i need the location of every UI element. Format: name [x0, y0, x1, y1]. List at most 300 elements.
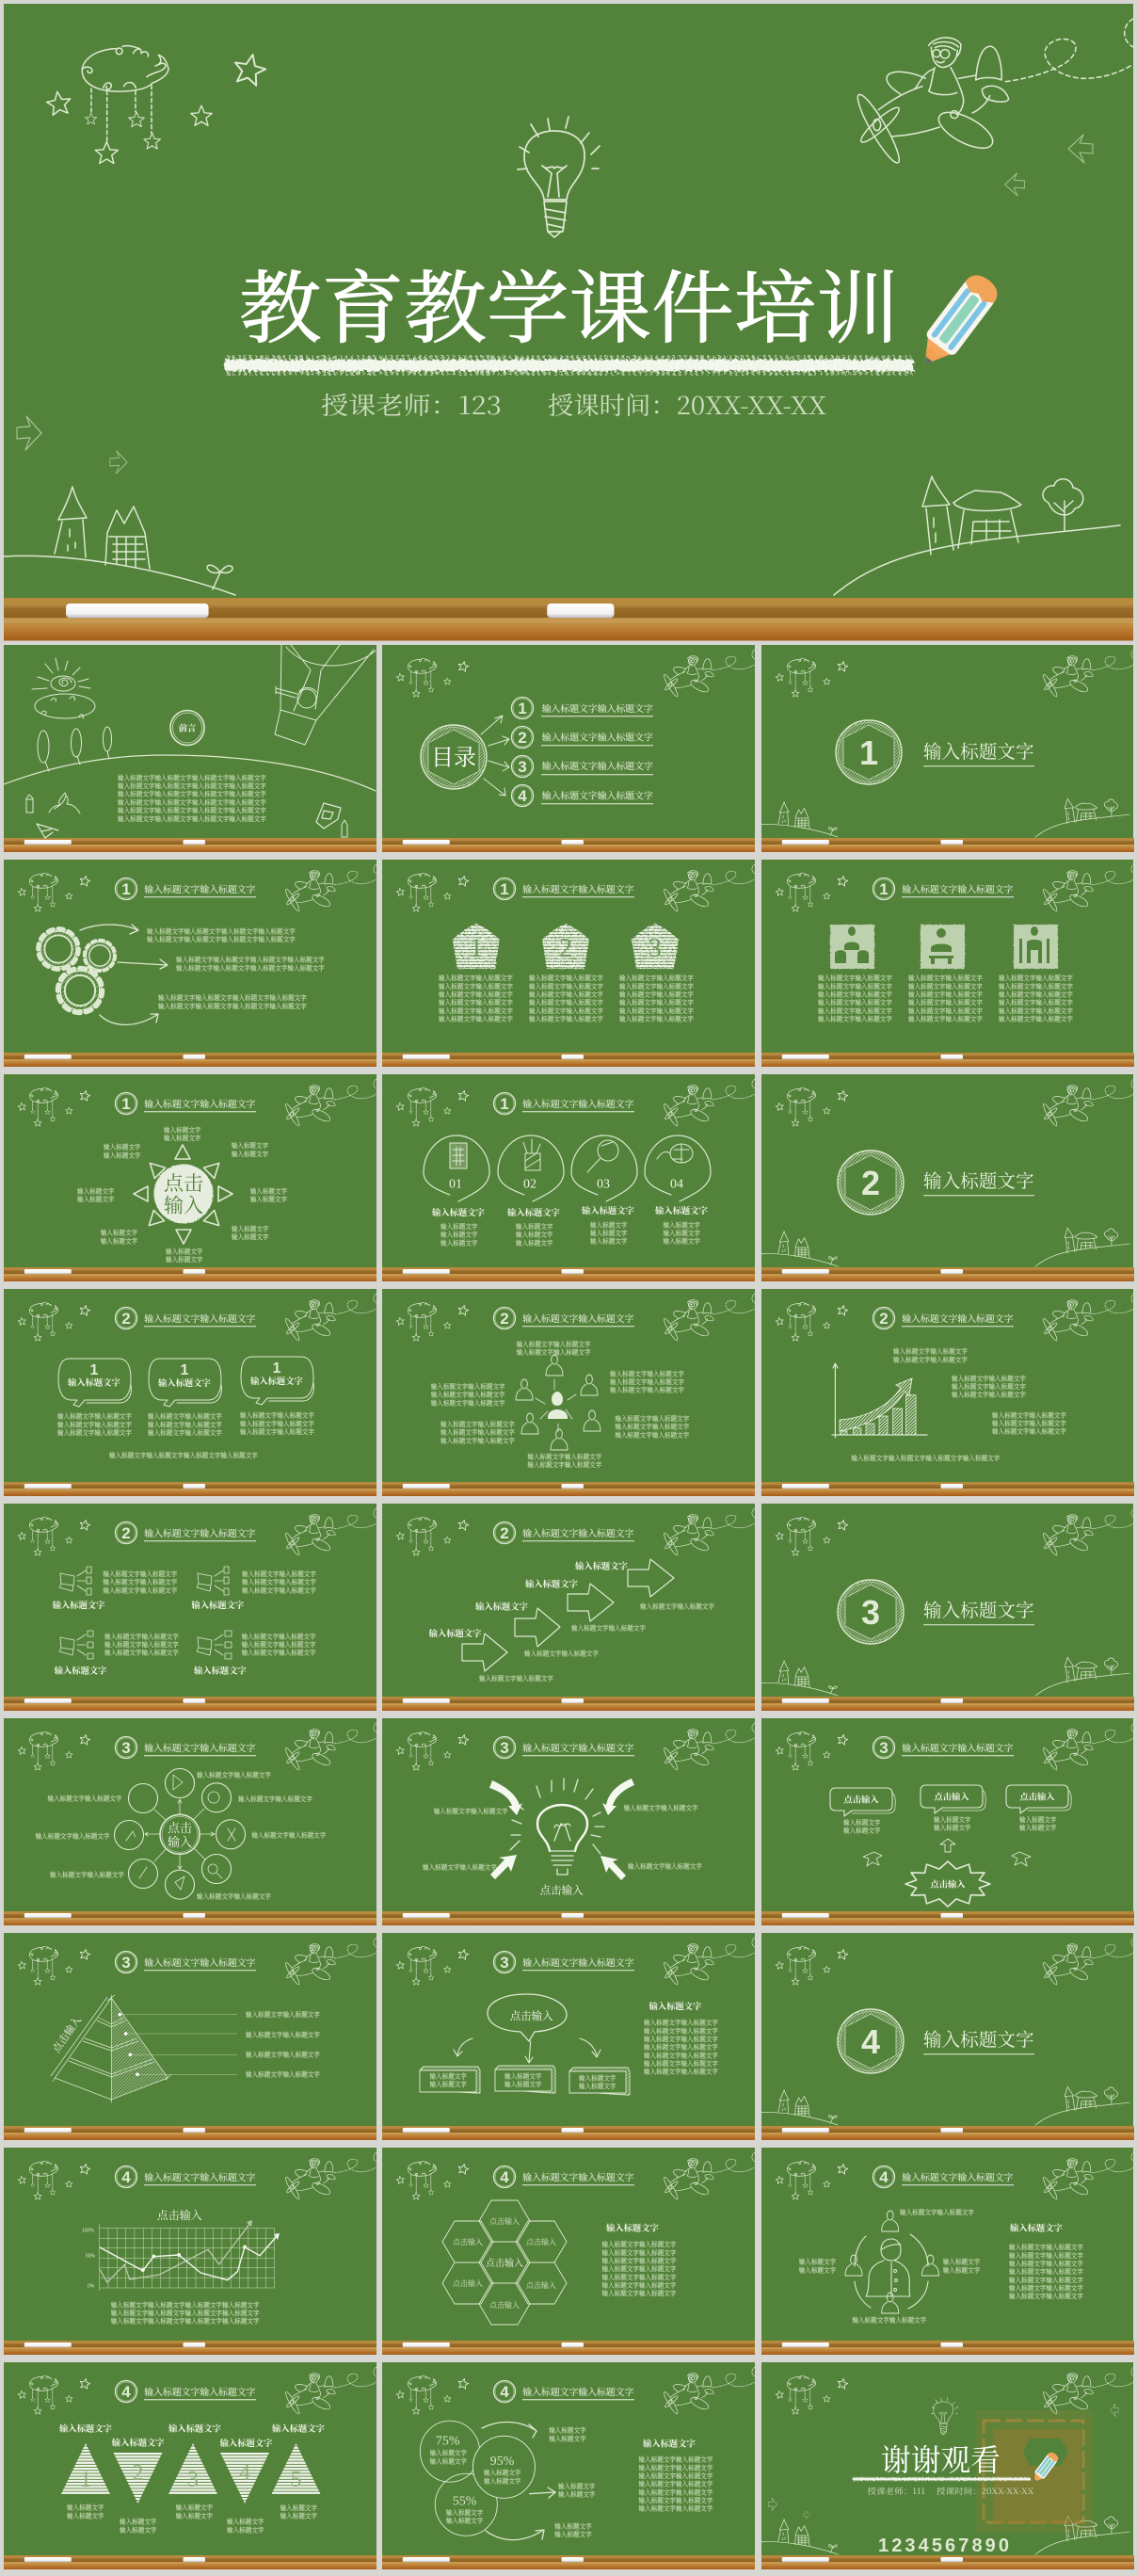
text columns: 输入标题文字输入标题文字 [818, 974, 892, 982]
labels: 输入标题文字 [166, 1255, 203, 1264]
side text: 输入标题文字输入标题文字 [602, 2248, 677, 2257]
titles: 输入标题文字 [475, 1601, 528, 1612]
hub label: 点击 [168, 1821, 192, 1835]
panel: slide chalk pentagons [382, 860, 755, 1067]
heading [873, 2165, 1014, 2188]
labels: 输入标题文字 [101, 1229, 138, 1237]
section badge: 2 [861, 1164, 880, 1202]
heading [115, 1307, 256, 1329]
labels: 输入标题文字 [232, 1150, 269, 1158]
doodles [18, 1508, 376, 1556]
labels: 输入标题文字 [549, 2434, 586, 2442]
heading: 输入标题文字输入标题文字 [522, 2171, 634, 2183]
panel: slide callouts and burst [761, 1718, 1134, 1925]
chalk tray [4, 1053, 376, 1067]
text columns: 输入标题文字输入标题文字 [619, 998, 694, 1006]
heading: 1 [500, 880, 509, 898]
chart title: 点击输入 [157, 2208, 202, 2222]
heading: 1 [121, 1095, 131, 1113]
titles: 输入标题文字 [53, 1600, 104, 1611]
text columns: 输入标题文字输入标题文字 [908, 1006, 983, 1015]
heading [873, 1307, 1014, 1329]
text columns: 输入标题文字输入标题文字 [999, 998, 1073, 1006]
sun centre [154, 1164, 213, 1224]
panel: slide line chart [4, 2148, 376, 2355]
labels: 输入标题文字输入标题文字 [893, 1347, 968, 1356]
titles: 输入标题文字 [582, 1205, 634, 1216]
underline [923, 1195, 1034, 1197]
captions: 输入标题文字 [67, 2511, 104, 2520]
heading [115, 877, 256, 900]
text columns: 输入标题文字输入标题文字 [818, 1006, 892, 1015]
text columns: 输入标题文字输入标题文字 [529, 1006, 603, 1015]
panel: slide flow boxes [382, 1933, 755, 2140]
side text: 输入标题文字输入标题文字 [644, 2051, 718, 2059]
text columns: 输入标题文字输入标题文字 [999, 982, 1073, 990]
side text: 输入标题文字输入标题文字 [644, 2043, 718, 2052]
side text: 输入标题文字输入标题文字 [638, 2463, 713, 2471]
labels: 输入标题文字输入标题文字 [246, 2050, 320, 2058]
text columns: 输入标题文字输入标题文字 [908, 982, 983, 990]
panel: slide sun diagram [4, 1074, 376, 1281]
numbers: 03 [597, 1177, 610, 1192]
labels: 输入标题文字 [549, 2426, 586, 2435]
labels: 输入标题文字 [554, 2530, 592, 2538]
labels: 输入标题文字 [166, 1247, 203, 1255]
burst [905, 1861, 990, 1907]
arrows [80, 925, 168, 1024]
side text: 输入标题文字输入标题文字 [1009, 2243, 1083, 2251]
axis labels: 100% [82, 2228, 94, 2233]
heading: 1 [879, 880, 889, 898]
labels [103, 1570, 316, 1657]
titles [53, 1600, 247, 1676]
honeycomb [442, 2200, 567, 2325]
text columns: 输入标题文字输入标题文字 [619, 974, 694, 982]
section title: 输入标题文字 [923, 2030, 1034, 2051]
title: 谢谢观看 [881, 2444, 1001, 2477]
chalk tray [382, 1911, 755, 1925]
labels: 输入标题文字 [250, 1195, 288, 1203]
labels: 输入标题文字输入标题文字 [50, 1870, 124, 1878]
labels: 输入标题文字输入标题文字 [246, 2069, 320, 2078]
circle captions: 输入标题文字 [430, 2456, 467, 2465]
chalk tray [382, 838, 755, 852]
labels: 输入标题文字输入标题文字 [900, 2208, 974, 2216]
doodles [776, 1938, 1134, 1986]
captions: 输入标题文字 [176, 2511, 213, 2520]
text columns: 输入标题文字输入标题文字 [999, 1006, 1073, 1015]
heading: 输入标题文字输入标题文字 [902, 2171, 1014, 2183]
text columns: 输入标题文字输入标题文字 [908, 974, 983, 982]
text block: 输入标题文字输入标题文字输入标题文字输入标题文字 [111, 2317, 260, 2326]
seal: preface: 前言 [179, 723, 196, 734]
panel: slide honeycomb [382, 2148, 755, 2355]
rotated label: 点击输入 [49, 2014, 84, 2055]
heading: 2 [500, 1524, 509, 1542]
captions: 输入标题文字输入标题文字 [524, 1650, 599, 1658]
captions: 输入标题文字 [67, 2504, 104, 2512]
captions [67, 2504, 317, 2534]
labels: 输入标题文字输入标题文字 [992, 1419, 1066, 1427]
callouts [830, 1785, 1071, 1816]
underline [923, 1624, 1034, 1626]
labels: 输入标题文字输入标题文字 [992, 1427, 1066, 1436]
labels: 输入标题文字输入标题文字 [615, 1423, 690, 1431]
text block: 输入标题文字输入标题文字输入标题文字输入标题文字 [118, 790, 266, 798]
doodles [396, 1079, 755, 1127]
labels: 输入标题文字 [232, 1232, 269, 1241]
icon: paper birds [17, 135, 1093, 474]
labels [549, 2426, 596, 2538]
captions [479, 1602, 714, 1682]
icon: light bulb [931, 2397, 958, 2435]
chalk pentagons: 3 [649, 934, 662, 963]
bar chart [832, 1363, 927, 1438]
text columns: 输入标题文字输入标题文字 [529, 1014, 603, 1022]
captions: 输入标题文字 [516, 1238, 553, 1247]
text columns: 输入标题文字输入标题文字 [529, 982, 603, 990]
labels: 输入标题文字输入标题文字 [246, 2030, 320, 2038]
box text: 输入标题文字 [579, 2073, 617, 2082]
heading: 输入标题文字输入标题文字 [144, 883, 256, 895]
percent values: 55% [453, 2495, 477, 2508]
percent values: 75% [436, 2435, 460, 2448]
side text: 输入标题文字输入标题文字 [644, 2035, 718, 2043]
numbered list: 输入标题文字输入标题文字 [542, 760, 653, 772]
subtitle: 授课老师：123 [321, 387, 502, 422]
labels: 输入标题文字输入标题文字 [246, 2010, 320, 2019]
text columns: 输入标题文字输入标题文字 [818, 998, 892, 1006]
text block: 输入标题文字输入标题文字输入标题文字输入标题文字 [118, 814, 266, 823]
heading [115, 1736, 256, 1759]
section badge: 3 [861, 1593, 880, 1632]
labels [423, 1804, 702, 1872]
text columns: 输入标题文字输入标题文字 [439, 998, 513, 1006]
labels: 输入标题文字输入标题文字 [431, 1382, 505, 1391]
doodles [776, 1723, 1134, 1771]
side text: 输入标题文字输入标题文字 [1009, 2292, 1083, 2300]
labels [36, 1771, 327, 1900]
labels: 输入标题文字 [164, 1134, 201, 1142]
labels: 输入标题文字 [799, 2265, 837, 2274]
labels: 输入标题文字输入标题文字 [517, 1340, 591, 1348]
axis labels [82, 2228, 96, 2290]
labels: 输入标题文字输入标题文字 [103, 1586, 178, 1594]
doodles [18, 2367, 376, 2415]
titles [429, 1560, 628, 1639]
labels: 输入标题文字输入标题文字 [952, 1382, 1026, 1391]
heading [115, 1951, 256, 1973]
doodles [18, 1723, 376, 1771]
labels: 输入标题文字输入标题文字 [434, 1807, 508, 1815]
heading: 4 [121, 2383, 131, 2401]
text block: 输入标题文字输入标题文字输入标题文字输入标题文字 [118, 773, 266, 781]
doodles [18, 1079, 376, 1127]
panel: closing slide [761, 2362, 1134, 2569]
captions: 输入标题文字 [934, 1815, 971, 1824]
titles: 输入标题文字 [429, 1628, 481, 1639]
side text: 输入标题文字输入标题文字 [1009, 2276, 1083, 2284]
labels: 输入标题文字输入标题文字 [103, 1578, 178, 1586]
heading: 3 [500, 1739, 509, 1757]
section title: 输入标题文字 [923, 1601, 1034, 1621]
chalk tray [761, 2341, 1134, 2355]
bubble labels: 输入标题文字 [250, 1376, 303, 1387]
heading: 输入标题文字输入标题文字 [902, 1312, 1014, 1325]
panel: slide people network [382, 1289, 755, 1496]
labels: 输入标题文字输入标题文字 [104, 1649, 179, 1657]
thick arrows [489, 1779, 634, 1880]
captions: 输入标题文字 [934, 1824, 971, 1832]
side text: 输入标题文字输入标题文字 [638, 2480, 713, 2488]
bubble labels: 1 [90, 1362, 99, 1378]
text blocks: 输入标题文字输入标题文字输入标题文字输入标题文字 [176, 956, 325, 964]
hub label: 输入 [168, 1835, 192, 1849]
numbered list: 4 [518, 787, 527, 805]
honeycomb: 点击输入 [526, 2237, 556, 2246]
bubble labels: 1 [273, 1360, 281, 1377]
labels: 输入标题文字输入标题文字 [610, 1386, 684, 1394]
chalk tray [4, 2555, 376, 2569]
captions: 输入标题文字 [227, 2518, 264, 2526]
labels: 输入标题文字 [104, 1151, 141, 1159]
labels: 输入标题文字 [558, 2490, 596, 2499]
side text: 输入标题文字输入标题文字 [638, 2504, 713, 2513]
heading [115, 2380, 256, 2403]
side text: 输入标题文字输入标题文字 [1009, 2267, 1083, 2276]
side text: 输入标题文字输入标题文字 [638, 2496, 713, 2504]
labels: 输入标题文字 [799, 2258, 837, 2266]
numbers: 04 [670, 1177, 683, 1192]
bubble labels [68, 1360, 303, 1389]
chalk tray [382, 1053, 755, 1067]
text columns: 输入标题文字输入标题文字 [529, 998, 603, 1006]
captions: 输入标题文字 [590, 1220, 628, 1229]
text columns: 输入标题文字输入标题文字 [999, 990, 1073, 998]
doodles: hills [761, 2516, 1129, 2554]
chalk tray [761, 1911, 1134, 1925]
doodles: hills and houses [4, 476, 1120, 595]
doodles [396, 1723, 755, 1771]
text columns [818, 974, 1073, 1022]
text columns: 输入标题文字输入标题文字 [439, 974, 513, 982]
titles: 输入标题文字 [507, 1207, 560, 1218]
heading: 输入标题文字输入标题文字 [144, 1527, 256, 1539]
underline [923, 2053, 1034, 2055]
heading: 输入标题文字输入标题文字 [144, 1312, 256, 1325]
heading [873, 1736, 1014, 1759]
side text: 输入标题文字输入标题文字 [602, 2256, 677, 2264]
side text: 输入标题文字输入标题文字 [1009, 2259, 1083, 2267]
side text: 输入标题文字输入标题文字 [644, 2059, 718, 2068]
triangle titles: 输入标题文字 [59, 2423, 112, 2435]
heading [493, 877, 634, 900]
circle captions: 输入标题文字 [484, 2469, 521, 2477]
side text: 输入标题文字输入标题文字 [602, 2289, 677, 2297]
doodles: hills [761, 798, 1129, 837]
heading [493, 1736, 634, 1759]
heading: 输入标题文字输入标题文字 [522, 1956, 634, 1969]
title: 教育教学课件培训 [239, 266, 899, 354]
triangle numbers: 1 [80, 2468, 91, 2492]
numbers: 02 [523, 1177, 536, 1192]
doodles [776, 2152, 1134, 2200]
heading: 输入标题文字输入标题文字 [522, 1312, 634, 1325]
titles: 输入标题文字 [432, 1207, 485, 1218]
panel: slide laptop links [4, 1504, 376, 1711]
box text: 输入标题文字 [429, 2080, 467, 2088]
bubble labels: 输入标题文字 [68, 1377, 120, 1388]
heading: 输入标题文字输入标题文字 [144, 2386, 256, 2398]
panel: section 3 [761, 1504, 1134, 1711]
contents circle [421, 725, 487, 789]
labels: 输入标题文字输入标题文字 [242, 1586, 316, 1594]
contents circle: 目录 [431, 746, 476, 770]
callout labels: 点击输入 [934, 1791, 969, 1802]
heading: 3 [121, 1954, 131, 1972]
labels [246, 2010, 320, 2078]
titles: 输入标题文字 [575, 1560, 628, 1571]
captions: 输入标题文字 [843, 1827, 881, 1835]
panel: slide big bulb [382, 1718, 755, 1925]
heading: 输入标题文字输入标题文字 [144, 2171, 256, 2183]
callout labels: 点击输入 [1019, 1791, 1055, 1802]
side title: 输入标题文字 [643, 2439, 696, 2450]
labels: 输入标题文字输入标题文字 [517, 1348, 591, 1357]
heading: 2 [879, 1310, 889, 1328]
axis labels: 50% [86, 2254, 96, 2260]
captions: 输入标题文字输入标题文字 [57, 1412, 132, 1421]
side title: 输入标题文字 [1010, 2223, 1063, 2234]
honeycomb: 点击输入 [489, 2216, 520, 2226]
labels: 输入标题文字输入标题文字 [103, 1570, 178, 1578]
labels: 输入标题文字输入标题文字 [242, 1578, 316, 1586]
heading: 3 [121, 1739, 131, 1757]
heading: 输入标题文字输入标题文字 [522, 883, 634, 895]
heading [873, 877, 1014, 900]
doodles: hills [761, 2086, 1129, 2125]
section badge [838, 1151, 904, 1215]
doodles: sun, cloud, trees and hill [4, 658, 376, 838]
text block: 输入标题文字输入标题文字输入标题文字输入标题文字 [118, 781, 266, 790]
labels: 输入标题文字输入标题文字 [197, 1771, 271, 1779]
underline [923, 765, 1034, 767]
heading [115, 2165, 256, 2188]
section badge: 4 [861, 2022, 880, 2061]
sun triangles [134, 1145, 232, 1244]
titles: 输入标题文字 [194, 1665, 247, 1676]
box text: 输入标题文字 [504, 2071, 542, 2080]
numbered list: 输入标题文字输入标题文字 [542, 789, 653, 802]
panel: slide gears [4, 860, 376, 1067]
section badge [838, 2009, 904, 2073]
text columns: 输入标题文字输入标题文字 [439, 1014, 513, 1022]
chalk tray [4, 838, 376, 852]
panel: slide hub and spokes [4, 1718, 376, 1925]
labels: 输入标题文字 [77, 1195, 115, 1203]
captions: 输入标题文字输入标题文字 [57, 1420, 132, 1428]
burst: 点击输入 [930, 1879, 966, 1891]
heading [493, 1307, 634, 1329]
labels: 输入标题文字 [77, 1186, 115, 1195]
side text: 输入标题文字输入标题文字 [602, 2273, 677, 2281]
captions: 输入标题文字 [120, 2518, 157, 2526]
titles: 输入标题文字 [55, 1665, 106, 1676]
labels [431, 1340, 690, 1469]
doodles [776, 1508, 1134, 1556]
captions: 输入标题文字 [440, 1222, 478, 1231]
panel: slide bar chart sketch [761, 1289, 1134, 1496]
labels: 输入标题文字输入标题文字 [610, 1369, 684, 1377]
captions: 输入标题文字输入标题文字 [148, 1428, 222, 1437]
captions: 输入标题文字输入标题文字 [240, 1419, 314, 1427]
captions: 输入标题文字输入标题文字 [57, 1428, 132, 1437]
chalk squares with people [830, 925, 1058, 969]
side text: 输入标题文字输入标题文字 [602, 2264, 677, 2273]
side text: 输入标题文字输入标题文字 [638, 2487, 713, 2496]
panel: section 2 [761, 1074, 1134, 1281]
heading: 3 [879, 1739, 889, 1757]
heading [493, 2380, 634, 2403]
heading [493, 2165, 634, 2188]
heading [115, 1521, 256, 1544]
captions: 输入标题文字输入标题文字 [640, 1602, 714, 1611]
pyramid [51, 1995, 237, 2102]
labels: 输入标题文字输入标题文字 [104, 1640, 179, 1649]
labels: 输入标题文字输入标题文字 [238, 1795, 312, 1803]
box text: 输入标题文字 [429, 2071, 467, 2080]
striped triangles [61, 2443, 320, 2504]
doodles: cloud, stars and plane [45, 19, 1133, 167]
chalk tray [761, 2555, 1134, 2569]
captions: 输入标题文字输入标题文字 [148, 1412, 222, 1421]
numbered list [512, 697, 653, 806]
heading: 输入标题文字输入标题文字 [144, 1098, 256, 1110]
line chart [100, 2220, 280, 2291]
sun centre: 点击 [164, 1172, 203, 1195]
triangle titles: 输入标题文字 [112, 2438, 165, 2449]
heading [493, 1521, 634, 1544]
person focus [845, 2211, 939, 2313]
chalk tray [4, 1911, 376, 1925]
text columns: 输入标题文字输入标题文字 [908, 990, 983, 998]
arrows [454, 2038, 601, 2063]
sun centre: 输入 [164, 1194, 203, 1216]
subtitle [321, 387, 826, 422]
side text: 输入标题文字输入标题文字 [638, 2471, 713, 2480]
heading [493, 1092, 634, 1115]
watermark [976, 2410, 1093, 2533]
triangle titles: 输入标题文字 [272, 2423, 325, 2435]
labels: 输入标题文字 [232, 1224, 269, 1232]
triangle titles: 输入标题文字 [220, 2438, 272, 2449]
doodles [396, 650, 755, 698]
doodles [18, 2152, 376, 2200]
labels: 输入标题文字 [164, 1125, 201, 1134]
panel: section 1 [761, 645, 1134, 852]
labels: 输入标题文字 [554, 2521, 592, 2530]
triangle numbers: 3 [187, 2468, 199, 2492]
bubble labels: 输入标题文字 [158, 1377, 211, 1389]
text block: 输入标题文字输入标题文字输入标题文字输入标题文字 [111, 2309, 260, 2317]
heading: 输入标题文字输入标题文字 [522, 1098, 634, 1110]
text columns: 输入标题文字输入标题文字 [529, 974, 603, 982]
triangle numbers [80, 2461, 301, 2492]
panel: slide chalk squares [761, 860, 1134, 1067]
side text: 输入标题文字输入标题文字 [644, 2026, 718, 2035]
doodles [18, 1938, 376, 1986]
